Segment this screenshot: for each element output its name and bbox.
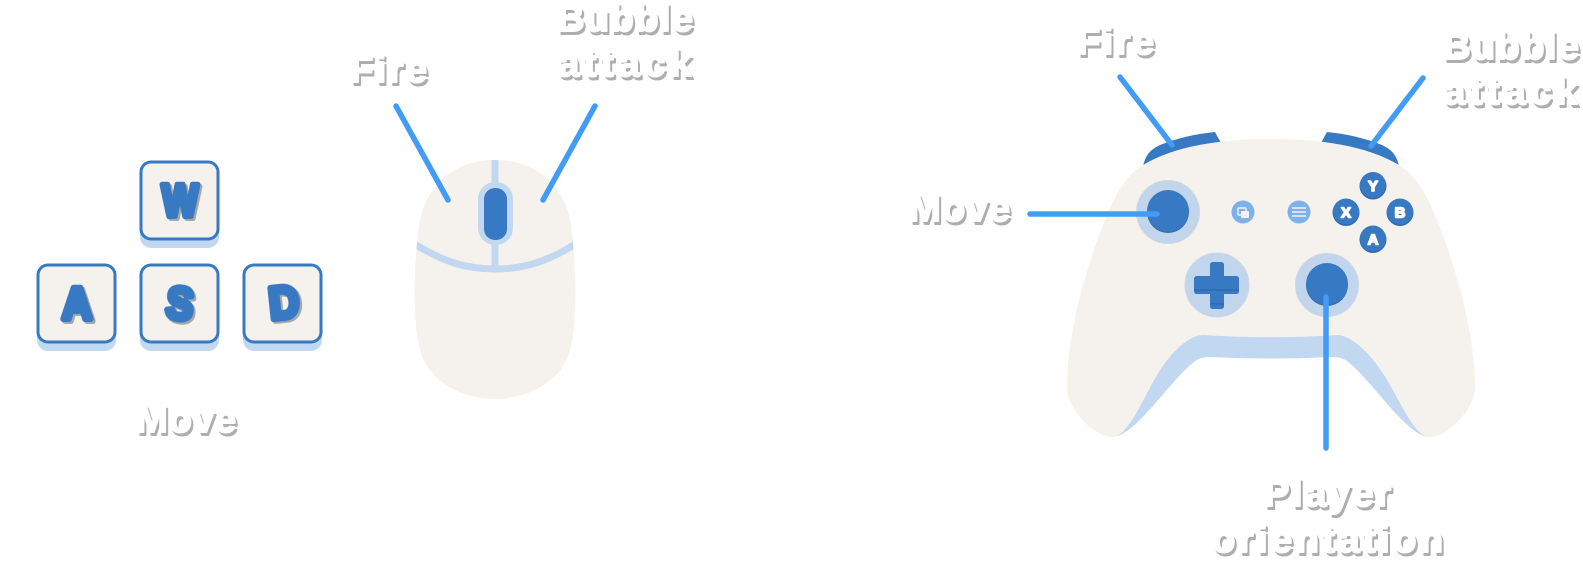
button A: A [1368, 232, 1379, 248]
lower grip band [1112, 335, 1430, 437]
label: gamepad player orientation [1212, 473, 1443, 561]
menu button [1288, 200, 1310, 224]
label: gamepad player orientation: orientation [1212, 519, 1443, 561]
key W: W [162, 175, 198, 226]
d-pad [1185, 253, 1249, 317]
pointer: mouse bubble attack [543, 106, 595, 200]
label: gamepad bubble attack [1443, 26, 1579, 113]
button X: X [1341, 204, 1351, 222]
button B: B [1395, 204, 1406, 222]
left stick [1136, 180, 1200, 244]
label: gamepad fire: Fire [1077, 21, 1154, 63]
mouse body [415, 160, 575, 399]
right bumper [1321, 132, 1399, 166]
left bumper [1143, 132, 1221, 166]
pointer: mouse fire [396, 106, 448, 200]
key S: S [164, 277, 196, 330]
pointer: gamepad bubble attack [1371, 78, 1423, 146]
mouse button seam [410, 160, 580, 269]
label: keyboard move: Move [136, 399, 236, 441]
label: mouse bubble attack: attack [558, 43, 692, 85]
right stick [1296, 254, 1358, 316]
gamepad body [1067, 139, 1475, 437]
button A [1360, 226, 1386, 253]
key A: A [62, 278, 92, 329]
button Y: Y [1368, 178, 1378, 195]
key A [37, 265, 116, 351]
key D: D [266, 276, 302, 329]
button Y [1360, 172, 1386, 200]
gamepad [1067, 132, 1475, 437]
pointer: gamepad player orientation [1323, 297, 1329, 448]
mouse wheel [478, 182, 513, 245]
mouse [410, 160, 580, 399]
key W [140, 162, 219, 248]
button B [1386, 198, 1414, 226]
key D [243, 265, 322, 351]
pointer: gamepad move [1030, 211, 1157, 217]
label: gamepad move: Move [909, 188, 1010, 230]
label: mouse bubble attack [557, 0, 693, 85]
pointer: gamepad fire [1120, 77, 1172, 145]
keyboard WASD keys [37, 162, 322, 351]
label: gamepad bubble attack: attack [1444, 71, 1578, 113]
label: gamepad player orientation: Player [1264, 473, 1391, 515]
key S [140, 265, 219, 351]
label: mouse fire: Fire [350, 49, 427, 91]
button X [1332, 198, 1360, 226]
view button [1232, 200, 1254, 224]
label: gamepad bubble attack: Bubble [1443, 26, 1579, 68]
